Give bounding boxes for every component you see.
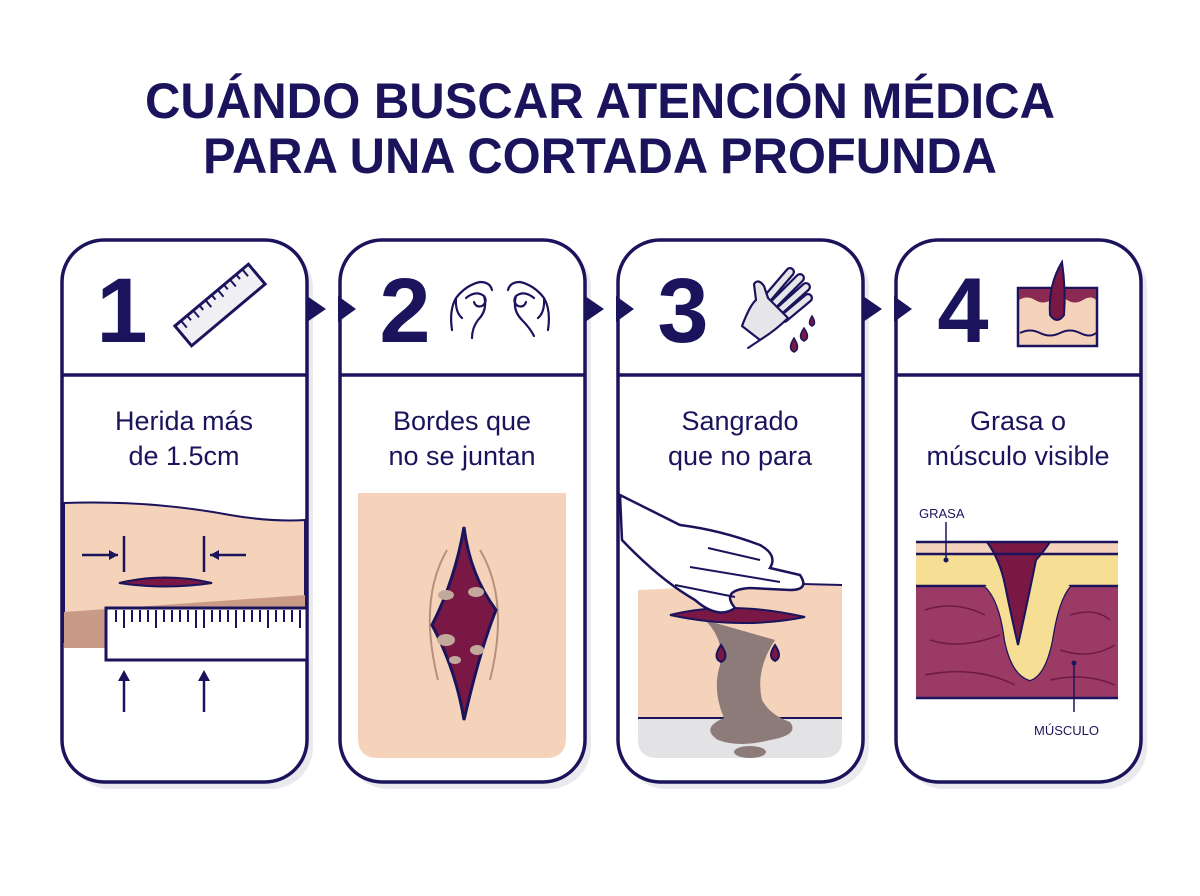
number 2: 2 bbox=[379, 260, 431, 362]
text: músculo visible bbox=[926, 441, 1110, 471]
title: PARA UNA CORTADA PROFUNDA bbox=[203, 128, 997, 184]
text: Grasa o bbox=[970, 406, 1066, 436]
illustration: tissue layers bbox=[916, 506, 1118, 738]
number 4: 4 bbox=[937, 260, 989, 362]
panel 4: grasa o músculo visible bbox=[894, 240, 1147, 789]
text bbox=[926, 406, 1110, 471]
panel 2: bordes que no se juntan bbox=[338, 240, 591, 789]
icon: skin cross-section bbox=[1018, 262, 1097, 346]
text: no se juntan bbox=[388, 441, 536, 471]
text: Sangrado bbox=[681, 406, 799, 436]
text: de 1.5cm bbox=[128, 441, 240, 471]
icon: hand with drops bbox=[742, 272, 814, 352]
title bbox=[145, 73, 1055, 184]
illustration: arm with ruler bbox=[64, 502, 307, 712]
text: Bordes que bbox=[393, 406, 531, 436]
text: que no para bbox=[668, 441, 813, 471]
title: CUÁNDO BUSCAR ATENCIÓN MÉDICA bbox=[145, 73, 1055, 129]
text bbox=[388, 406, 536, 471]
panel 1: herida más de 1.5cm bbox=[62, 240, 313, 789]
icon: ruler bbox=[175, 264, 265, 346]
label: grasa: GRASA bbox=[919, 506, 965, 521]
panel 3: sangrado que no para bbox=[616, 240, 869, 789]
number 3: 3 bbox=[657, 260, 709, 362]
arrow 2 bbox=[585, 296, 604, 322]
icon: hands bbox=[451, 282, 549, 338]
label: músculo: MÚSCULO bbox=[1034, 723, 1099, 738]
illustration: gaping wound bbox=[358, 493, 566, 758]
arrow 3 bbox=[863, 296, 882, 322]
text: Herida más bbox=[115, 406, 253, 436]
arrow 1 bbox=[307, 296, 326, 322]
illustration: pressure on bleeding wound bbox=[620, 495, 842, 758]
number 1: 1 bbox=[96, 260, 148, 362]
text bbox=[115, 406, 253, 471]
text bbox=[668, 406, 813, 471]
